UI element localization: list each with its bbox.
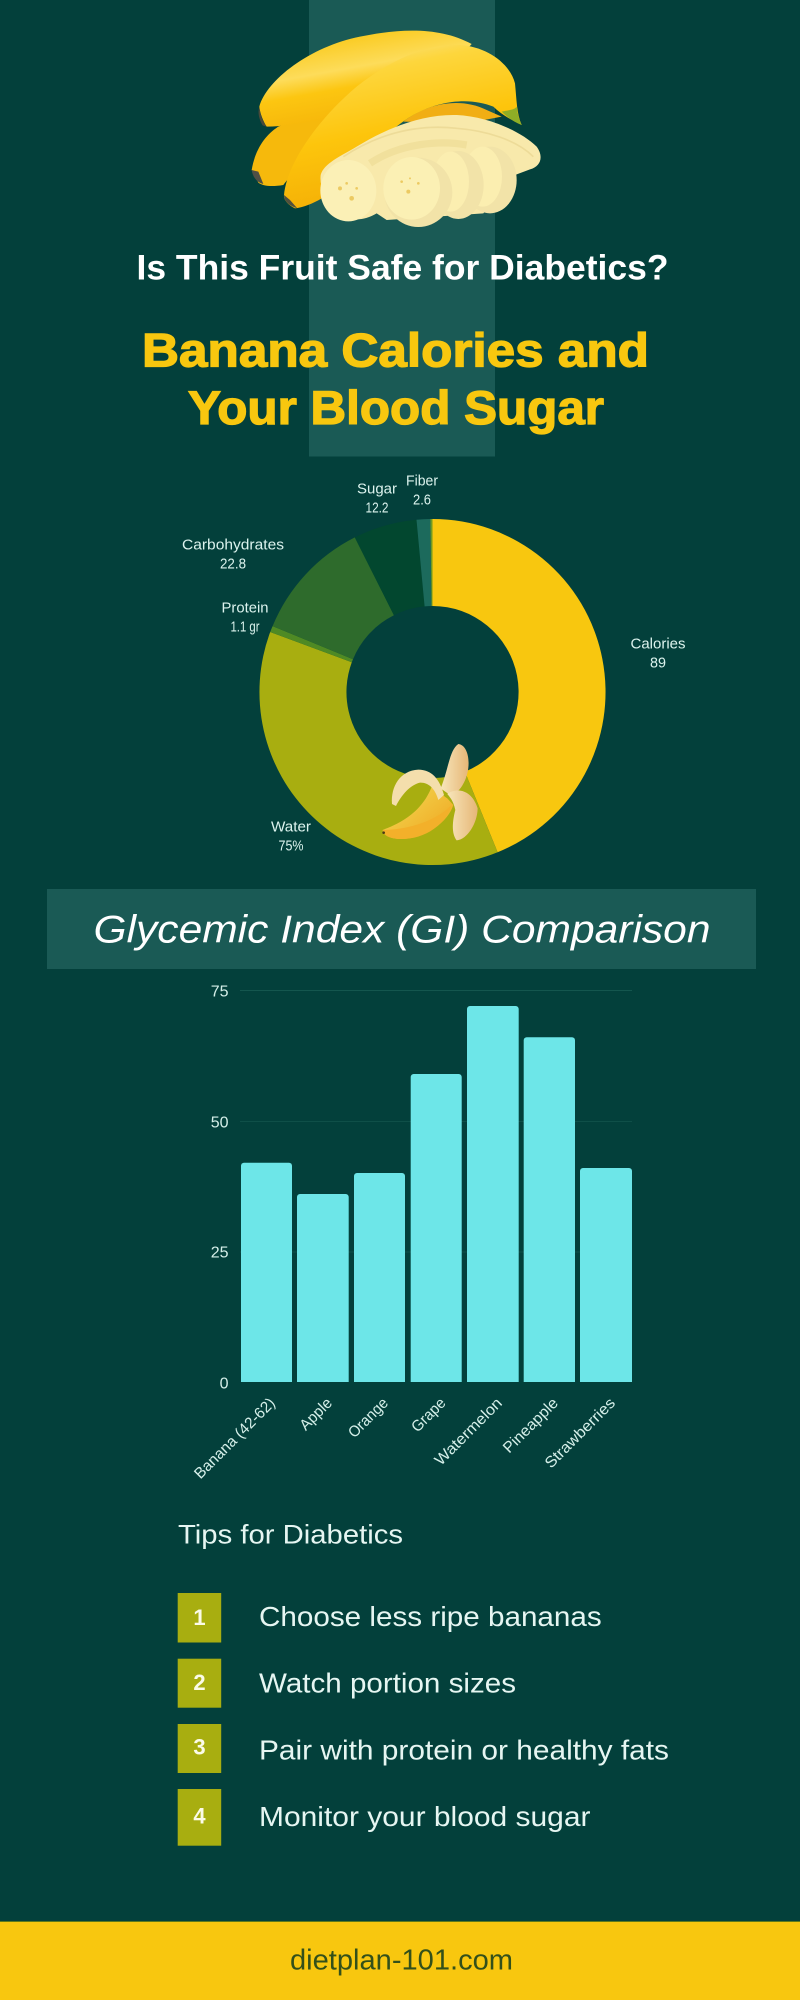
segment: protein (270, 626, 353, 662)
x axis labels: Apple (297, 1395, 336, 1434)
label: sugar: 12.2 (366, 499, 388, 516)
donut labels (182, 472, 686, 854)
heading: subtitle question: Is This Fruit Safe for Diabetics? (136, 248, 668, 288)
bars (241, 1006, 632, 1382)
y axis labels: 50 (211, 1115, 229, 1132)
label: water: Water (271, 818, 311, 835)
footer website: dietplan-101.com (290, 1944, 513, 1976)
tip 3: Pair with protein or healthy fats (259, 1734, 669, 1765)
label: carbohydrates: Carbohydrates (182, 536, 284, 553)
x axis labels: Banana (42-62) (191, 1395, 279, 1482)
label: calories: 89 (650, 654, 666, 671)
label: water (271, 818, 311, 854)
heading: main title (142, 324, 649, 434)
segment: carbohydrates (273, 537, 394, 659)
heading: glycemic index comparison: Glycemic Index (GI) Comparison (94, 909, 710, 952)
y axis labels: 75 (211, 984, 229, 1001)
panel: teal header column (309, 0, 495, 456)
label: sugar (357, 480, 397, 516)
tip 1 (178, 1593, 602, 1642)
panel: glycemic index heading band (47, 889, 756, 969)
label: calories (630, 635, 686, 671)
y axis labels: 0 (220, 1375, 229, 1392)
chart: glycemic index bars (191, 984, 632, 1482)
x axis labels: Pineapple (500, 1395, 562, 1457)
bar: strawberries (580, 1168, 632, 1382)
tip 2: 2 (193, 1670, 206, 1695)
segment: sugar (355, 520, 425, 615)
bar: pineapple (524, 1037, 575, 1382)
segment: remainder sliver (430, 519, 432, 606)
tip 3: 3 (193, 1735, 206, 1760)
segment: fiber (416, 519, 432, 606)
y axis labels: 25 (211, 1245, 229, 1262)
footer band (0, 1921, 800, 2000)
segment: water (259, 632, 498, 865)
label: protein (222, 599, 268, 636)
tip 3 (178, 1724, 669, 1773)
bar: grape (411, 1074, 462, 1382)
bar: watermelon (467, 1006, 519, 1382)
bar: banana (241, 1163, 292, 1382)
x axis labels: Orange (345, 1395, 392, 1441)
y axis labels (211, 984, 229, 1392)
label: carbohydrates: 22.8 (220, 555, 246, 572)
label: fiber (406, 472, 438, 508)
label: calories: Calories (630, 635, 686, 652)
tip 4: Monitor your blood sugar (259, 1801, 590, 1832)
x axis labels: Strawberries (542, 1395, 619, 1472)
tip 1: 1 (193, 1605, 206, 1630)
tip 2: Watch portion sizes (259, 1668, 516, 1699)
icon: half peeled banana (382, 744, 478, 840)
heading: main title: Banana Calories and (142, 324, 649, 376)
label: fiber: Fiber (406, 472, 438, 489)
label: protein: Protein (222, 599, 268, 616)
label: protein: 1.1 gr (230, 618, 260, 636)
bar: orange (354, 1173, 405, 1382)
tip 2 (178, 1659, 516, 1708)
label: fiber: 2.6 (413, 491, 431, 508)
label: water: 75% (278, 837, 304, 854)
tip 1: Choose less ripe bananas (259, 1601, 602, 1632)
chart: banana nutrition donut (259, 519, 606, 865)
x axis labels: Watermelon (432, 1395, 506, 1469)
icon: bananas with peeled sliced banana (252, 31, 541, 227)
label: sugar: Sugar (357, 480, 397, 497)
heading: main title: Your Blood Sugar (188, 381, 604, 434)
panel: tips list (178, 1593, 669, 1846)
x axis labels: Grape (408, 1395, 449, 1436)
segment: calories (432, 519, 606, 852)
tip 4 (178, 1789, 590, 1846)
tip 4: 4 (193, 1803, 206, 1828)
label: carbohydrates (182, 536, 284, 572)
x axis labels (191, 1395, 619, 1482)
bar: apple (297, 1194, 349, 1382)
heading: tips for diabetics: Tips for Diabetics (178, 1519, 403, 1549)
